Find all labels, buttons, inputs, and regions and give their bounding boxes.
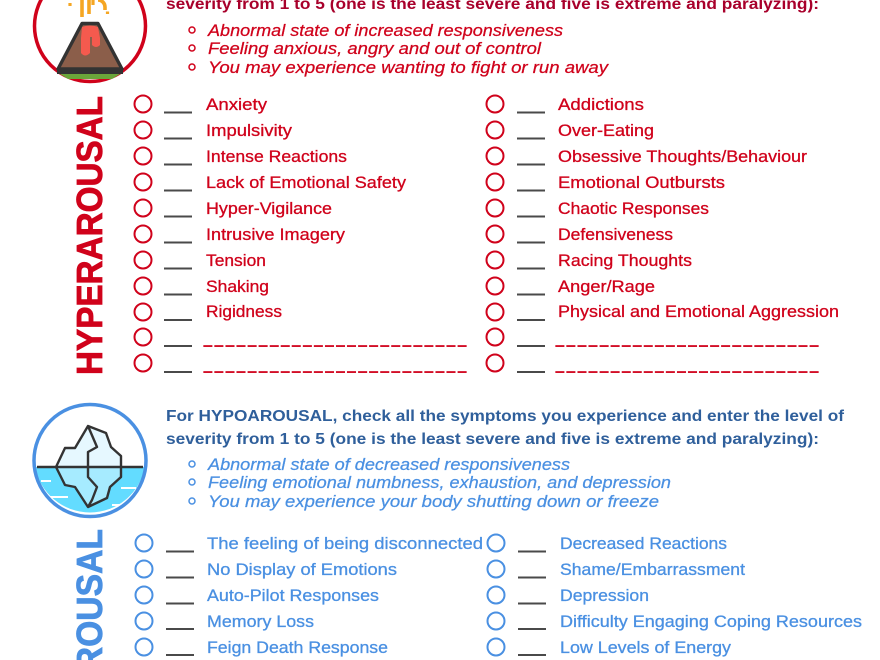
checklist: hyperarousal left column: ________________________ [203, 330, 466, 346]
bullet list: hyperarousal description: Abnormal state of increased responsiveness [207, 21, 564, 40]
checklist: hyperarousal left column: Tension [206, 251, 266, 270]
bullet list: hypoarousal description: You may experience your body shutting down or freeze [208, 492, 659, 511]
checklist: hyperarousal right column: ________________________ [555, 356, 818, 372]
checklist: hyperarousal left column: Rigidness [206, 302, 282, 321]
checklist: hyperarousal left column: Intense Reactions [206, 147, 347, 166]
checklist: hyperarousal left column: Anxiety [206, 95, 268, 114]
checklist: hypoarousal right column: Low Levels of Energy [560, 638, 732, 657]
heading: hypoarousal instructions [166, 408, 845, 448]
heading: hypoarousal instructions: severity from 1 to 5 (one is the least severe and five is extreme and paralyzing): [166, 431, 819, 448]
bullet list: hyperarousal description: You may experience wanting to fight or run away [208, 58, 610, 77]
checklist: hypoarousal left column: The feeling of being disconnected [207, 534, 483, 553]
checklist: hypoarousal left column: Feign Death Response [207, 638, 388, 657]
checklist: hypoarousal left column: Auto-Pilot Responses [207, 586, 379, 605]
checklist: hyperarousal right column: Emotional Outbursts [558, 173, 725, 192]
checklist: hypoarousal right column [488, 534, 862, 657]
checklist: hypoarousal right column: Difficulty Engaging Coping Resources [560, 612, 862, 631]
panel: hyperarousal [34, 0, 839, 375]
checklist: hypoarousal right column: Depression [560, 586, 649, 605]
checklist: hypoarousal left column: Memory Loss [207, 612, 314, 631]
checklist: hyperarousal right column: Obsessive Thoughts/Behaviour [558, 147, 807, 166]
checklist: hyperarousal right column [486, 95, 839, 372]
icon: volcano [34, 0, 146, 82]
vertical label: hyperarousal: HYPERAROUSAL [69, 96, 110, 375]
checklist: hyperarousal left column: Hyper-Vigilance [206, 199, 332, 218]
panel: hypoarousal [34, 404, 862, 657]
bullet list: hyperarousal description [189, 21, 610, 77]
checklist: hyperarousal left column: Intrusive Imagery [206, 225, 346, 244]
bullet list: hypoarousal description: Feeling emotional numbness, exhaustion, and depression [208, 473, 671, 492]
checklist: hypoarousal left column: No Display of Emotions [207, 560, 397, 579]
bullet list: hyperarousal description: Feeling anxious, angry and out of control [208, 39, 542, 58]
checklist: hyperarousal right column: Chaotic Responses [558, 199, 709, 218]
checklist: hypoarousal right column: Shame/Embarrassment [560, 560, 745, 579]
checklist: hyperarousal left column [134, 95, 466, 372]
checklist: hyperarousal right column: ________________________ [555, 330, 818, 346]
checklist: hyperarousal right column: Racing Thoughts [558, 251, 692, 270]
checklist: hyperarousal right column: Physical and Emotional Aggression [558, 302, 839, 321]
checklist: hyperarousal left column: Impulsivity [206, 121, 293, 140]
heading: hypoarousal instructions: For HYPOAROUSAL, check all the symptoms you experience and enter the level of [166, 408, 845, 425]
checklist: hyperarousal right column: Addictions [558, 95, 644, 114]
checklist: hyperarousal right column: Anger/Rage [558, 277, 655, 296]
checklist: hyperarousal left column: ________________________ [203, 356, 466, 372]
icon: iceberg [34, 404, 146, 516]
checklist: hyperarousal right column: Over-Eating [558, 121, 654, 140]
checklist: hypoarousal left column [136, 534, 483, 657]
checklist: hyperarousal left column: Lack of Emotional Safety [206, 173, 407, 192]
checklist: hyperarousal left column: Shaking [206, 277, 269, 296]
checklist: hyperarousal right column: Defensiveness [558, 225, 673, 244]
bullet list: hypoarousal description: Abnormal state of decreased responsiveness [207, 455, 571, 474]
checklist: hypoarousal right column: Decreased Reactions [560, 534, 727, 553]
bullet list: hypoarousal description [189, 455, 671, 511]
